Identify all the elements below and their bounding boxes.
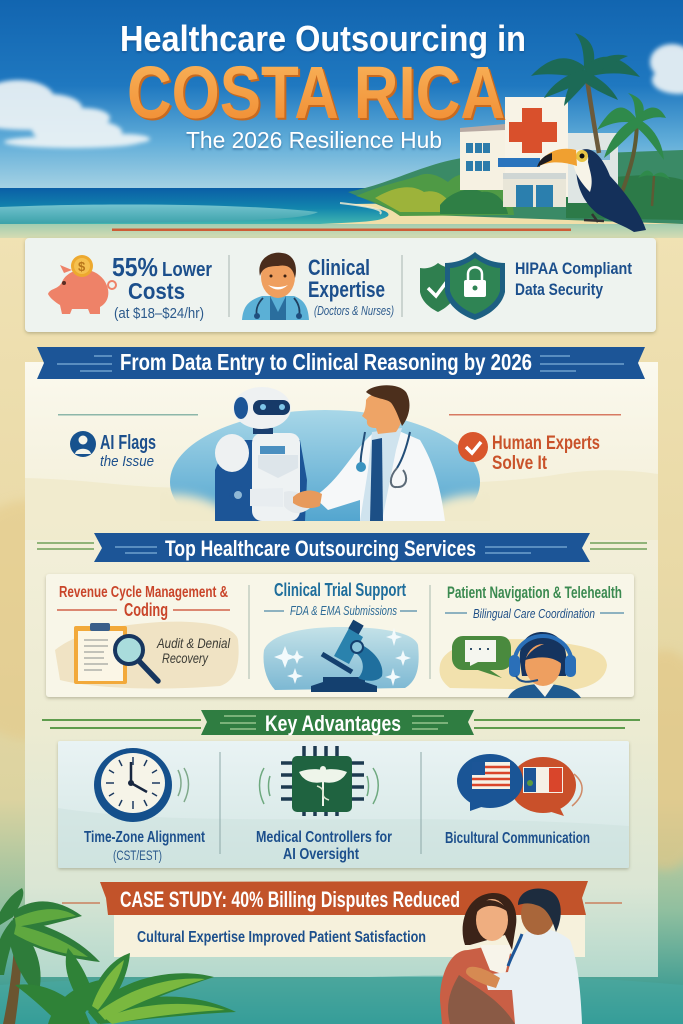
clouds — [0, 44, 683, 148]
palm trees — [531, 33, 670, 206]
hills and bushes — [348, 150, 683, 224]
service: revenue cycle: Audit & Denial — [156, 635, 231, 651]
panel: main content — [25, 362, 658, 977]
text: HIPAA: Data Security — [515, 280, 603, 299]
backdrop orb — [170, 410, 480, 521]
icon: chat bubble — [452, 636, 511, 678]
text: clinical expertise: (Doctors & Nurses) — [314, 303, 394, 318]
text: HIPAA: HIPAA Compliant — [515, 259, 632, 278]
banner: key advantages: Key Advantages — [265, 711, 401, 736]
scene: sky, sea and beach — [0, 0, 683, 238]
text: advantages labels: AI Oversight — [283, 846, 359, 863]
callout: AI flags: the Issue — [100, 453, 154, 470]
text: advantages labels: Bicultural Communication — [445, 830, 590, 847]
background: sand and water — [0, 220, 683, 1024]
case study — [62, 881, 622, 957]
illustration: foreground palms — [0, 888, 236, 1024]
icon: piggy bank: $ — [78, 259, 86, 274]
text: clinical expertise — [308, 255, 394, 318]
callout: AI flags — [58, 414, 198, 470]
panel: advantages — [58, 741, 629, 868]
service: clinical trial: Clinical Trial Support — [274, 580, 406, 600]
text: lower costs: Costs — [128, 278, 185, 304]
panel: key benefits — [25, 238, 656, 332]
service: revenue cycle: Coding — [124, 600, 168, 620]
service: clinical trial: FDA & EMA Submissions — [290, 603, 397, 618]
icon: doctor avatar — [242, 253, 309, 320]
text: lower costs: (at $18–$24/hr) — [114, 305, 204, 322]
icon: clipboard and magnifier — [74, 623, 158, 684]
service: patient navigation: Bilingual Care Coordination — [473, 606, 595, 621]
text: lower costs — [112, 252, 212, 322]
icon: AI chip with caduceus — [260, 746, 378, 816]
callout: human experts: Human Experts — [492, 433, 600, 454]
text: clinical expertise: Clinical — [308, 255, 370, 280]
banner: services heading — [37, 533, 647, 562]
icon: headset agent — [508, 632, 581, 698]
case study: CASE STUDY: 40% Billing Disputes Reduced — [120, 887, 460, 912]
text: advantages labels: Medical Controllers for — [256, 829, 392, 846]
text: lower costs: Lower — [162, 259, 212, 281]
banner: services heading: Top Healthcare Outsourcing Services — [165, 536, 476, 561]
illustration: AI and doctor handshake — [170, 385, 480, 521]
doctor — [293, 385, 445, 521]
title: COSTA RICA — [129, 53, 507, 136]
illustration: foreground water — [0, 976, 683, 1024]
banner: data entry heading: From Data Entry to Clinical Reasoning by 2026 — [120, 349, 532, 375]
patient — [440, 893, 520, 1024]
banner: key advantages — [42, 710, 640, 736]
doctor — [466, 888, 582, 1024]
banner: data entry heading — [37, 347, 645, 379]
callout: human experts — [449, 414, 621, 474]
service: patient navigation — [439, 583, 624, 698]
robot — [215, 387, 310, 521]
decorative red line — [112, 228, 571, 231]
icon: microscope — [274, 620, 411, 692]
panel: services — [46, 574, 634, 698]
callout: human experts: Solve It — [492, 453, 548, 474]
title — [120, 18, 526, 153]
icon: security shields — [420, 252, 505, 320]
hospital building — [460, 97, 618, 207]
text: HIPAA — [515, 259, 632, 299]
text: lower costs: 55% — [112, 252, 158, 282]
service: revenue cycle: Recovery — [162, 650, 209, 666]
text: advantages labels — [84, 829, 590, 863]
illustration: patient and doctor — [440, 888, 582, 1024]
title: Healthcare Outsourcing in — [120, 18, 526, 59]
text: advantages labels: (CST/EST) — [113, 847, 162, 863]
icon: bicultural speech bubbles — [457, 754, 582, 816]
toucan — [537, 149, 646, 232]
icon: clock — [94, 748, 188, 822]
case study: Cultural Expertise Improved Patient Satisfaction — [137, 929, 426, 946]
service: revenue cycle: Revenue Cycle Management & — [59, 584, 228, 601]
service: revenue cycle — [55, 584, 239, 688]
service: clinical trial — [263, 580, 419, 692]
callout: AI flags: AI Flags — [100, 432, 156, 454]
title: COSTA RICA — [127, 51, 505, 134]
text: clinical expertise: Expertise — [308, 277, 385, 302]
title: The 2026 Resilience Hub — [186, 127, 442, 153]
icon: piggy bank — [48, 255, 116, 314]
text: advantages labels: Time-Zone Alignment — [84, 829, 205, 846]
